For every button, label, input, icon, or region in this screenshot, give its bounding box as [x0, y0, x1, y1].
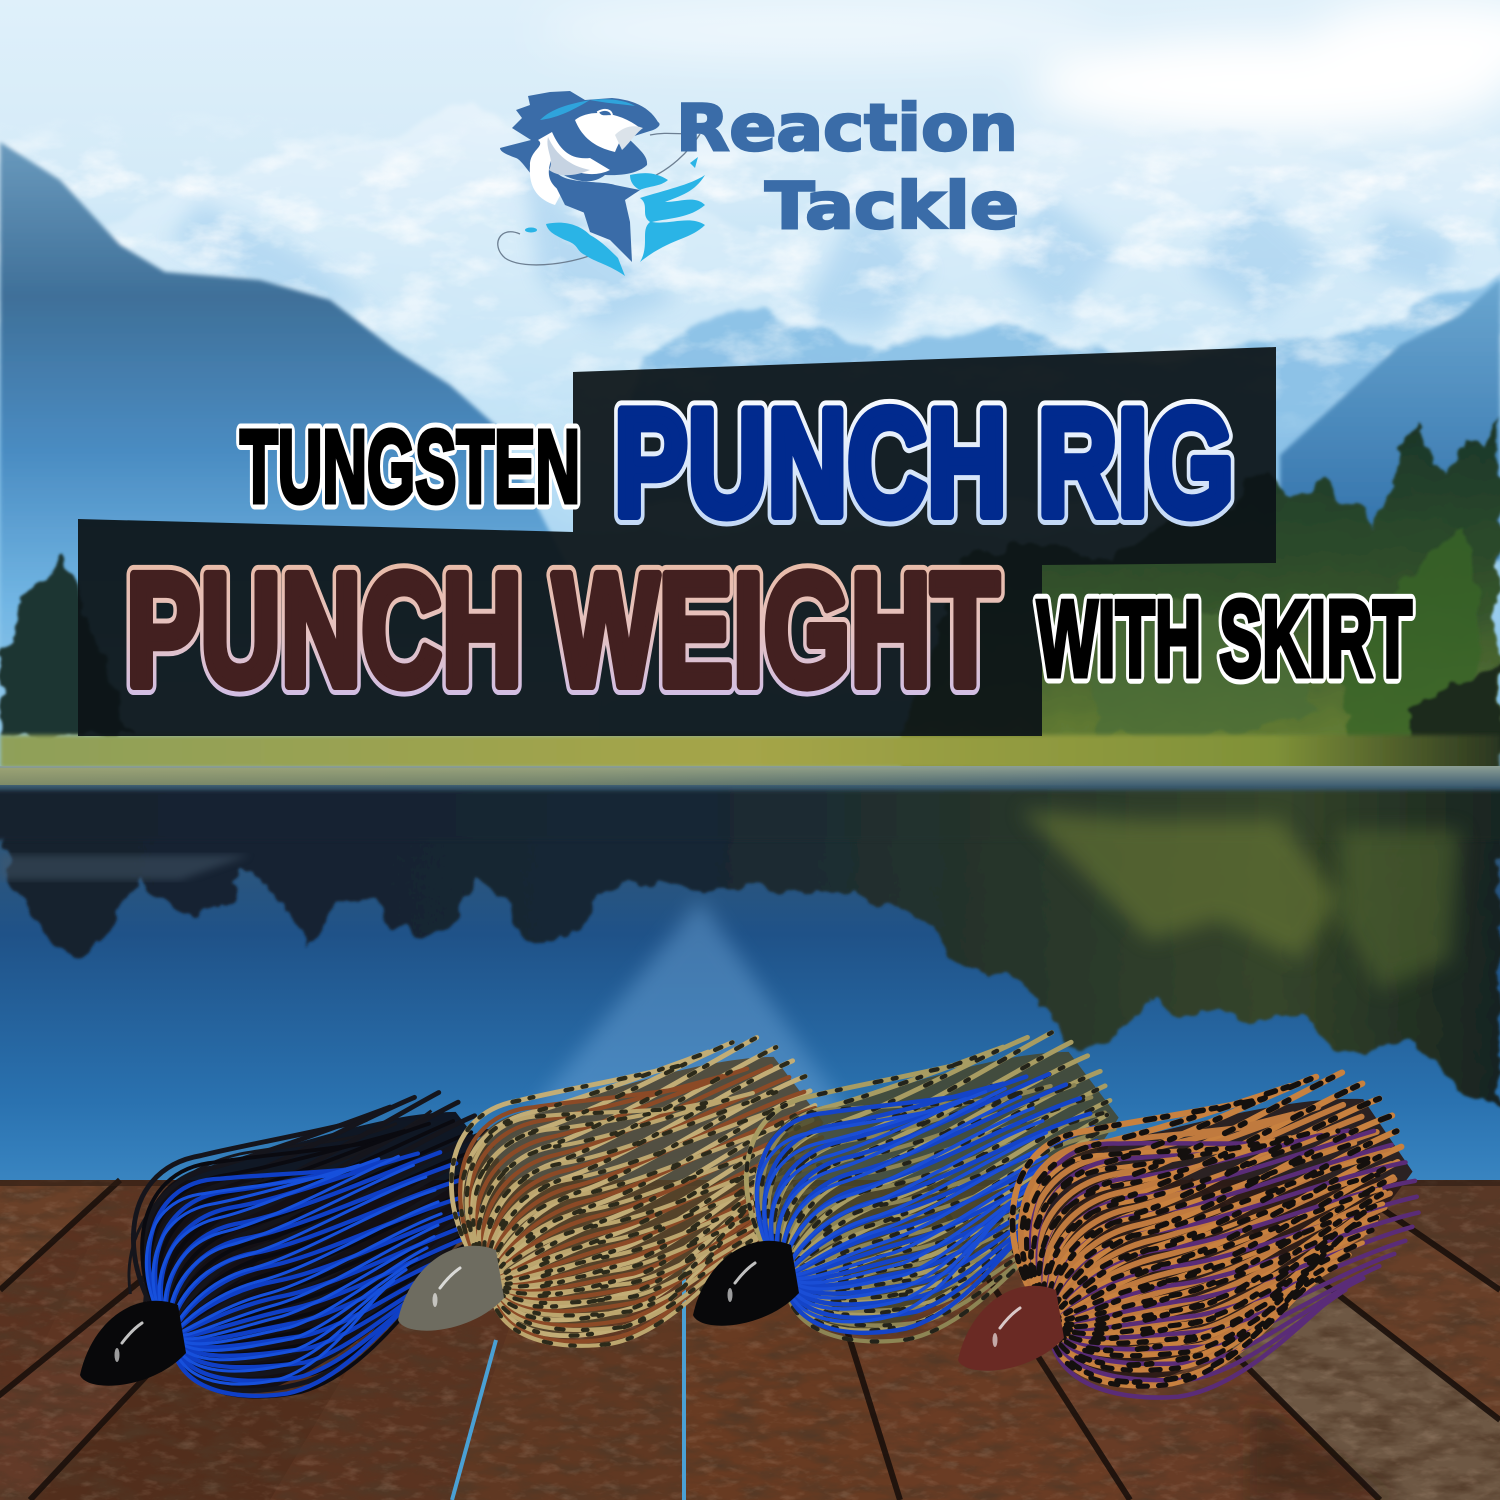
lure: blue and tan: [693, 1013, 1133, 1378]
background: left trees: [0, 560, 130, 735]
heading: PUNCH WEIGHT: [126, 540, 999, 719]
text: Tackle: Tackle: [765, 170, 1019, 244]
background: right mountain: [1280, 280, 1500, 560]
heading: TUNGSTEN: TUNGSTEN: [240, 409, 580, 524]
text: Reaction: Reaction: [676, 92, 1018, 166]
background: clouds: [540, 0, 1500, 135]
lure: green pumpkin tan: [398, 1018, 834, 1382]
heading: PUNCH RIG: PUNCH RIG: [614, 378, 1234, 548]
background: left mountain: [0, 142, 600, 760]
logo: Reaction Tackle: [498, 91, 1019, 276]
icon: leaping bass: [498, 91, 705, 276]
heading: PUNCH WEIGHT: PUNCH WEIGHT: [126, 540, 999, 719]
lure: orange and purple: [958, 1034, 1440, 1450]
background: right tree highlights: [1090, 520, 1500, 790]
heading: TUNGSTEN: TUNGSTEN: [240, 409, 580, 524]
heading: PUNCH RIG: PUNCH RIG: [614, 378, 1234, 548]
background: wooden dock: [0, 1180, 1500, 1500]
icon: water splash: [525, 157, 705, 276]
background: snowy mountain range: [0, 95, 1500, 760]
lure: black and blue: [80, 1073, 513, 1427]
background: sky: [0, 0, 1500, 790]
background: lake: [0, 766, 1500, 1190]
background: grass bank: [0, 735, 1500, 778]
panel: dark title backing: [78, 347, 1276, 736]
heading: PUNCH WEIGHT: PUNCH WEIGHT: [126, 540, 999, 719]
background: right forest: [900, 420, 1500, 775]
heading: TUNGSTEN: [240, 409, 580, 524]
